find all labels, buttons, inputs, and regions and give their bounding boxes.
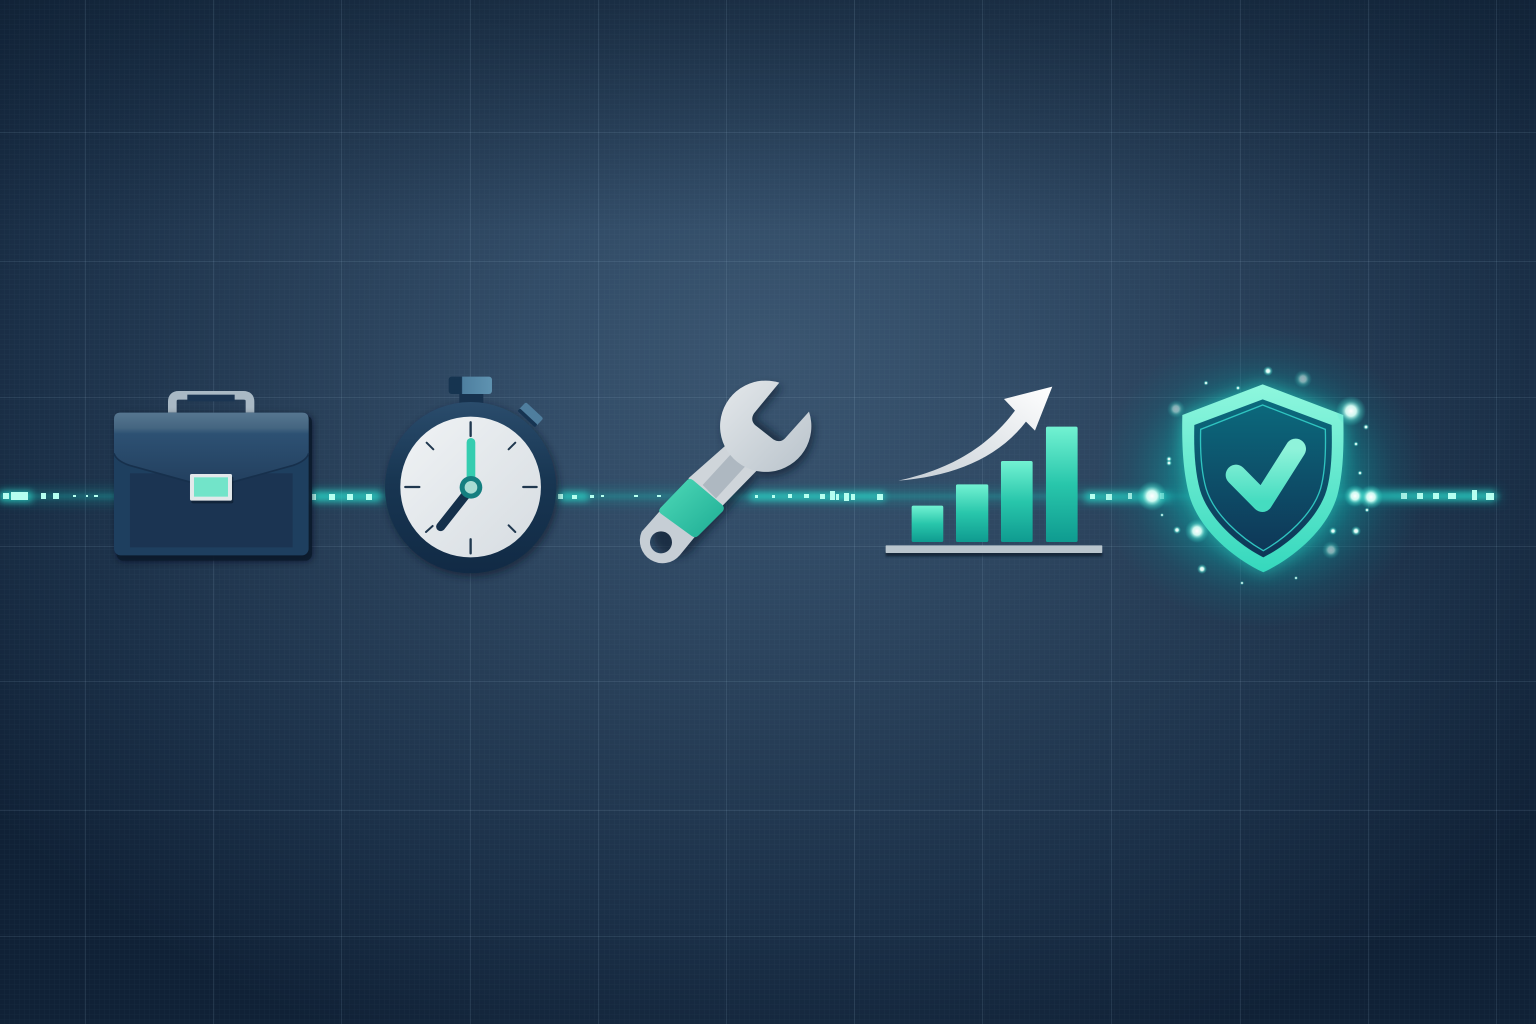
teal grip bbox=[659, 479, 724, 537]
teal minute hand bbox=[458, 442, 484, 483]
wrench eye bbox=[640, 512, 695, 563]
bar 2 bbox=[956, 484, 988, 542]
icon: briefcase bbox=[114, 395, 312, 561]
navy hour hand bbox=[441, 488, 471, 527]
wrench shank bbox=[688, 444, 757, 507]
briefcase flap bbox=[114, 413, 309, 488]
icon: wrench bbox=[640, 381, 814, 563]
glowing data line bbox=[0, 490, 1500, 502]
watch face bbox=[400, 417, 541, 557]
chart baseline bbox=[886, 545, 1102, 556]
wrench head bbox=[720, 381, 811, 472]
icon: growth chart bbox=[886, 387, 1102, 556]
bar 1 bbox=[912, 506, 943, 542]
briefcase clasp bbox=[190, 474, 233, 503]
bar 4 bbox=[1046, 427, 1078, 542]
shield inner bbox=[1194, 399, 1332, 557]
watch case bbox=[385, 402, 556, 573]
bar 3 bbox=[1001, 461, 1033, 542]
tick marks bbox=[405, 422, 537, 553]
sparkles bbox=[1137, 366, 1383, 585]
icon: stopwatch bbox=[385, 377, 559, 577]
shield inner line bbox=[1200, 405, 1326, 551]
rising arrow bbox=[898, 387, 1052, 481]
icon: shield with glow bbox=[1097, 328, 1427, 628]
check mark bbox=[1236, 449, 1296, 502]
watch shadow bbox=[387, 405, 559, 577]
clock hub bbox=[460, 476, 482, 499]
wrench shadow bbox=[653, 385, 814, 557]
shield outer bbox=[1182, 384, 1344, 572]
side button bbox=[517, 402, 543, 427]
shield halo bbox=[1097, 328, 1427, 628]
shield rim glow bbox=[1182, 384, 1344, 572]
briefcase body bbox=[114, 413, 312, 561]
crown button bbox=[449, 377, 492, 407]
flap seam bbox=[114, 453, 309, 488]
briefcase handle bbox=[172, 395, 250, 413]
